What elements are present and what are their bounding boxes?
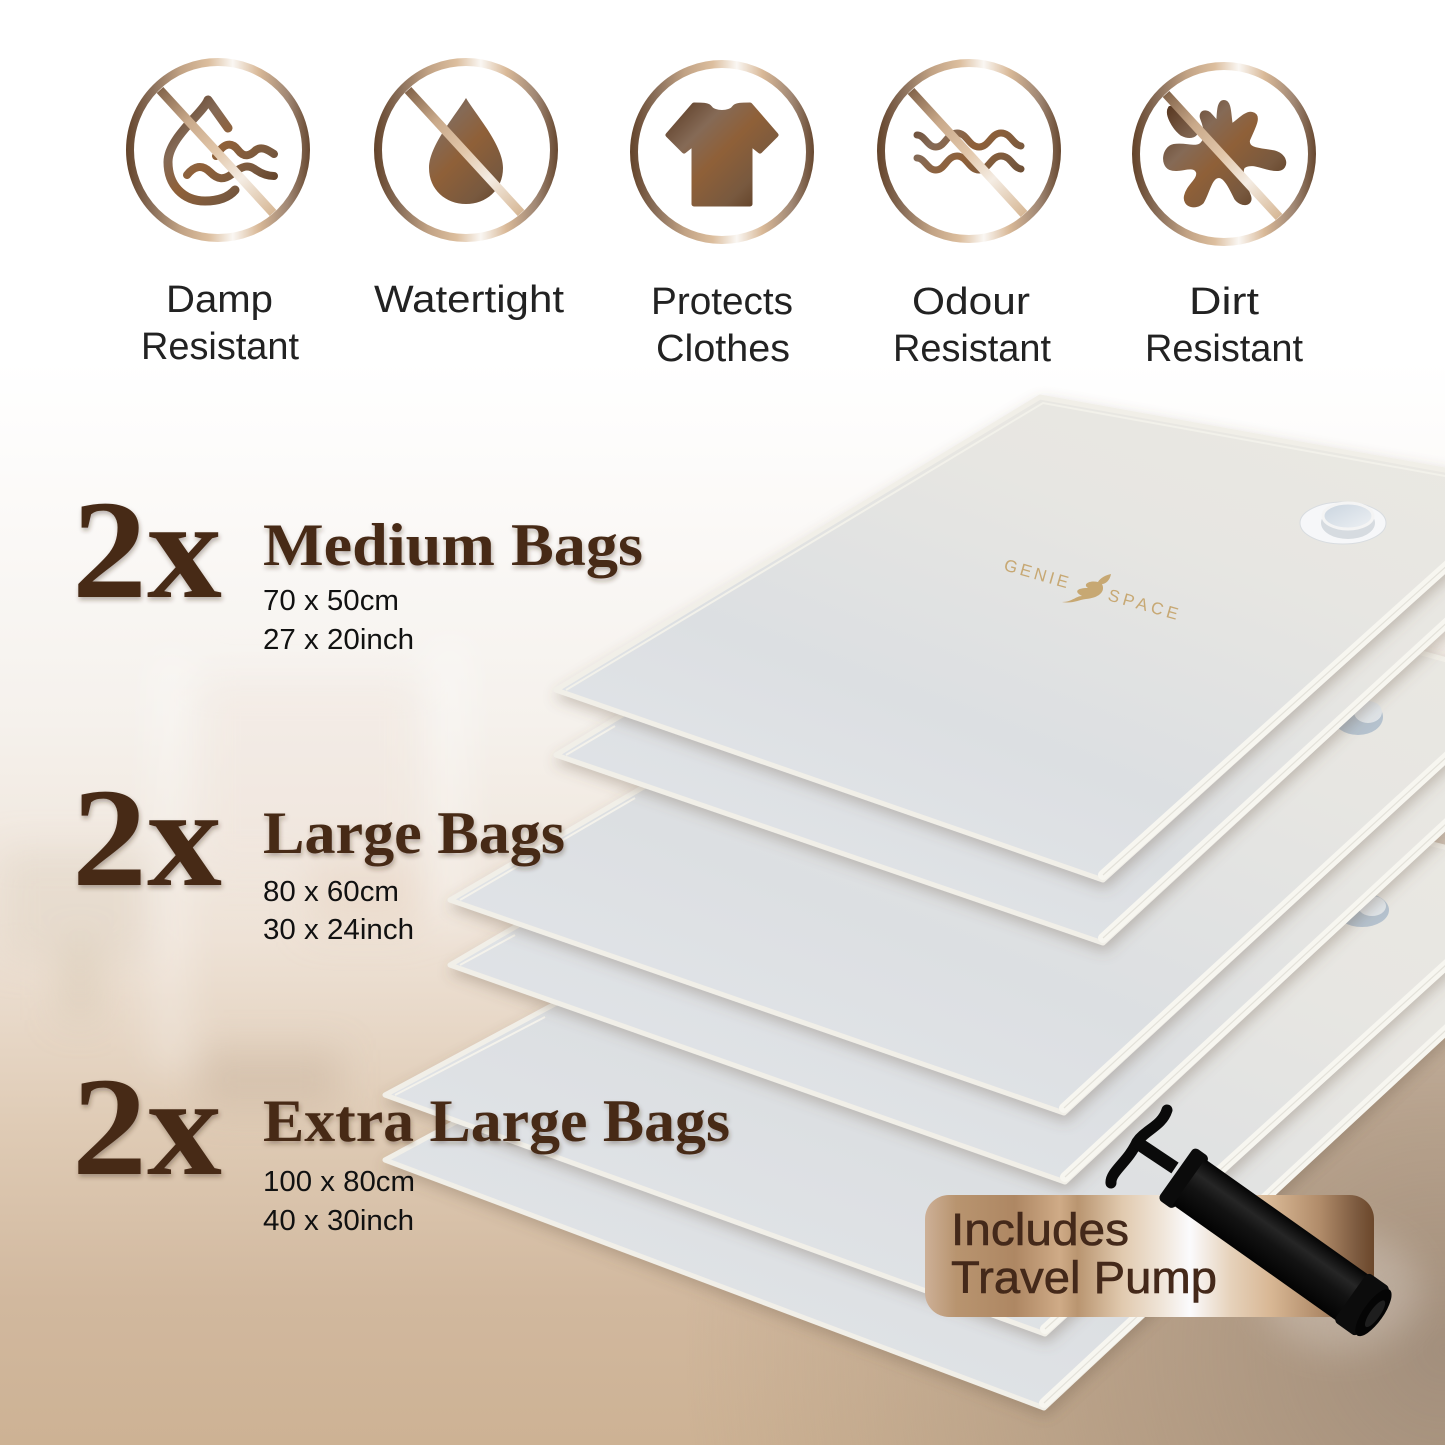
valve: medium bag (1300, 502, 1386, 544)
size: medium inch: 27 x 20inch (263, 624, 414, 656)
heading: extra large bags: Extra Large Bags (263, 1088, 730, 1154)
label: damp resistant: Resistant (141, 326, 299, 368)
size: extra large inch: 40 x 30inch (263, 1205, 414, 1237)
label: watertight: Watertight (374, 279, 564, 321)
icon: watertight (378, 62, 554, 238)
label: protects clothes: Clothes (656, 328, 790, 370)
quantity: 2x large: 2x (72, 760, 222, 916)
extra large bag, lower (385, 810, 1445, 1408)
label: dirt resistant: Dirt (1189, 281, 1260, 323)
label: dirt resistant: Resistant (1145, 328, 1303, 370)
bag stack (385, 397, 1445, 1408)
heading: large bags: Large Bags (263, 800, 565, 866)
icon: protects clothes (634, 64, 810, 240)
label: odour resistant: Resistant (893, 328, 1051, 370)
label: odour resistant: Odour (912, 281, 1030, 323)
row: large bags (72, 760, 565, 946)
quantity: 2x extra large: 2x (72, 1049, 222, 1205)
icon: travel pump (1111, 1110, 1400, 1344)
size: medium cm: 70 x 50cm (263, 585, 399, 617)
glow behind pump (1260, 1230, 1420, 1350)
icon: dirt resistant (1136, 66, 1312, 242)
quantity: 2x medium: 2x (72, 472, 222, 628)
extra large bag, upper (385, 745, 1445, 1334)
size: large cm: 80 x 60cm (263, 876, 399, 908)
brand logo (1002, 556, 1180, 624)
size: large inch: 30 x 24inch (263, 914, 414, 946)
heading: medium bags: Medium Bags (263, 512, 643, 578)
label: odour resistant (893, 281, 1051, 370)
valve peek: large bag (1333, 699, 1383, 735)
label: dirt resistant (1145, 281, 1303, 370)
callout: includes travel pump: Travel Pump (951, 1252, 1217, 1303)
icon: damp resistant (130, 62, 306, 238)
valve peek: extra large bag (1335, 893, 1389, 927)
large bag, upper (450, 549, 1445, 1113)
label: damp resistant (141, 279, 299, 368)
row: extra large bags (72, 1049, 730, 1237)
callout: includes travel pump (925, 1195, 1374, 1317)
callout: includes travel pump: Includes (951, 1204, 1129, 1255)
medium bag, lower (556, 462, 1445, 943)
label: damp resistant: Damp (166, 279, 273, 321)
brand logo: GENIE (1002, 556, 1071, 592)
size: extra large cm: 100 x 80cm (263, 1166, 415, 1198)
row: medium bags (72, 472, 643, 656)
label: protects clothes (651, 281, 793, 370)
brand logo: SPACE (1106, 586, 1180, 624)
label: protects clothes: Protects (651, 281, 793, 323)
large bag, lower (450, 614, 1445, 1182)
icon: odour resistant (881, 63, 1057, 239)
medium bag, upper (556, 397, 1445, 880)
